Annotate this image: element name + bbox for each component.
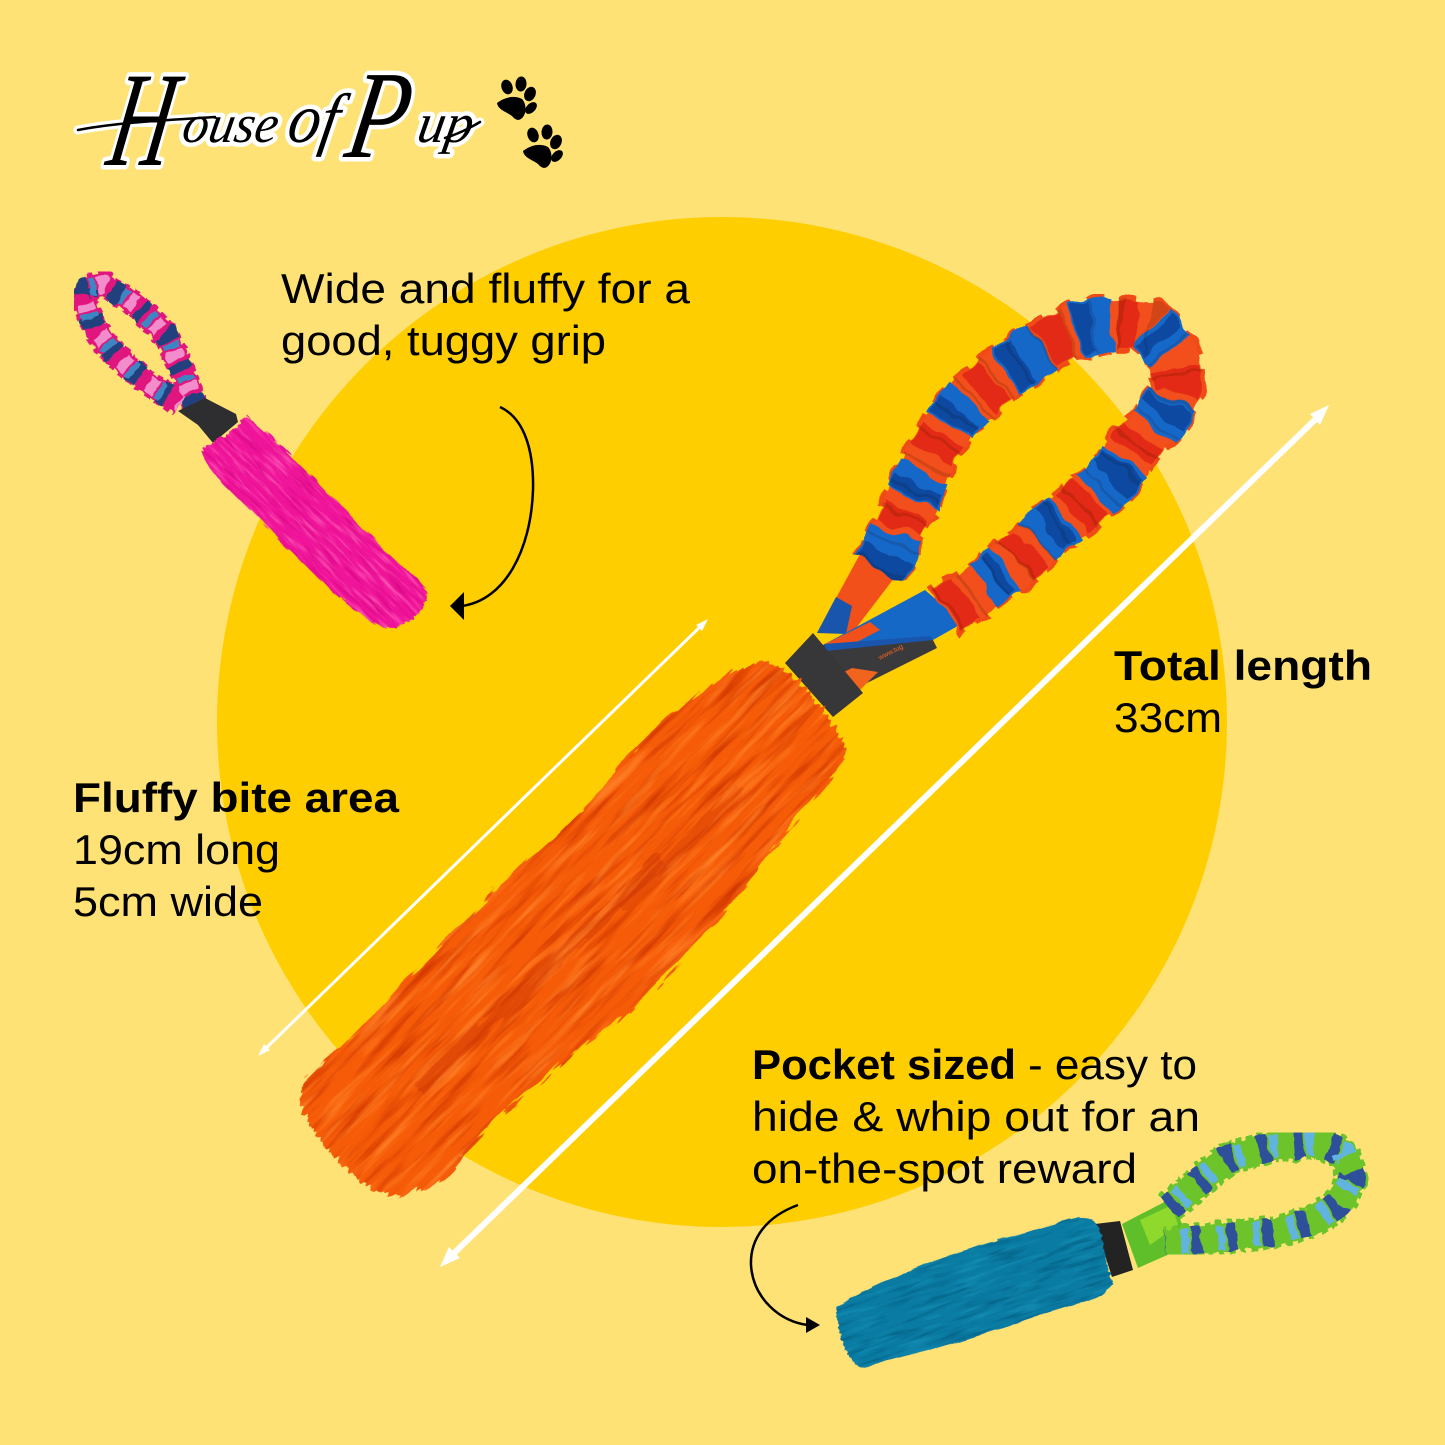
toy: blue tug <box>792 1136 1352 1445</box>
text: fluffy bite area <box>73 774 400 925</box>
icon: paw prints <box>497 76 565 168</box>
pink bungee loop <box>85 284 195 405</box>
text: pocket sized: hide & whip out for an <box>752 1093 1200 1140</box>
blue fur <box>792 1136 1156 1445</box>
logo: House of Pup: H <box>98 46 192 195</box>
label tag <box>823 636 937 690</box>
icon: upper paw <box>497 76 539 120</box>
text: wide and fluffy <box>281 265 691 364</box>
text: fluffy bite area: Fluffy bite area <box>73 774 400 821</box>
orange loop neck <box>817 545 963 656</box>
icon: lower paw <box>523 124 565 168</box>
pink collar <box>178 398 238 443</box>
logo: House of Pup: P <box>337 47 422 185</box>
text: pocket sized <box>752 1041 1200 1192</box>
logo: House of Pup <box>78 46 487 195</box>
orange bungee loop <box>880 323 1178 612</box>
orange fur <box>31 388 1112 1445</box>
logo: House of Pup: up <box>413 93 479 155</box>
arrow: to pink toy <box>450 407 533 620</box>
yellow circle <box>217 217 1227 1227</box>
toy: pink tug <box>85 284 535 742</box>
text: fluffy bite area: 5cm wide <box>73 878 263 925</box>
text: wide and fluffy: Wide and fluffy for a <box>281 265 691 312</box>
text: total length: Total length <box>1114 642 1372 689</box>
blue collar <box>1095 1221 1133 1277</box>
text: pocket sized: Pocket sized <box>752 1041 1016 1088</box>
arrow: to blue toy <box>751 1205 820 1333</box>
arrow: total length <box>440 405 1329 1267</box>
arrow: fluffy bite area <box>258 619 708 1056</box>
text: wide and fluffy: good, tuggy grip <box>281 317 606 364</box>
text: pocket sized: on-the-spot reward <box>752 1145 1137 1192</box>
label tag: www.tug <box>877 643 905 662</box>
collar <box>785 633 863 717</box>
pink fur <box>96 303 535 742</box>
logo: House of Pup: of <box>283 80 354 158</box>
text: pocket sized: - easy to <box>1028 1041 1197 1088</box>
logo: House of Pup: ouse <box>178 94 284 154</box>
text: fluffy bite area: 19cm long <box>73 826 280 873</box>
toy: large orange tug <box>31 323 1178 1445</box>
green bungee loop <box>1165 1143 1352 1244</box>
text: total length <box>1114 642 1372 741</box>
text: total length: 33cm <box>1114 694 1222 741</box>
green neck <box>1122 1198 1190 1268</box>
